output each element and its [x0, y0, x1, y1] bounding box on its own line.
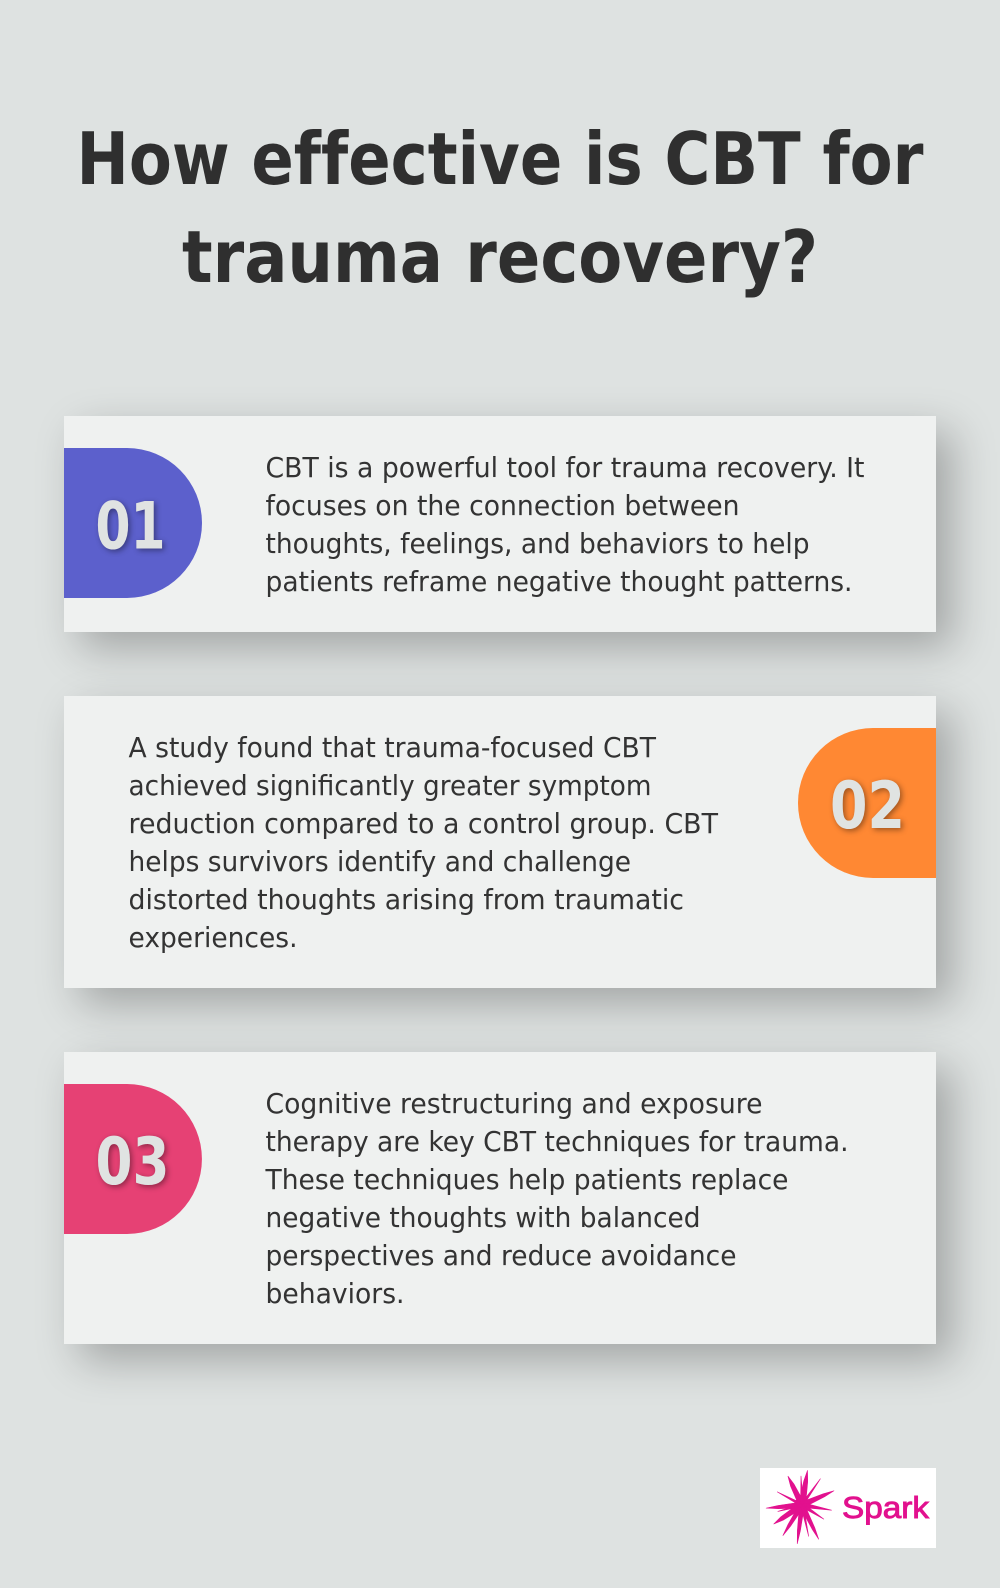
text block 02: achieved significantly greater symptom: [128, 769, 652, 802]
text block 02: [128, 731, 719, 954]
text block 03: therapy are key CBT techniques for trauma.: [266, 1125, 848, 1158]
text block 03: negative thoughts with balanced: [266, 1201, 700, 1234]
text block 02: reduction compared to a control group. CBT: [128, 807, 719, 840]
logo: Spark: [760, 1468, 936, 1548]
text block 03: [265, 1087, 848, 1310]
badge 02: 02: [830, 769, 905, 844]
text block 03: behaviors.: [266, 1277, 404, 1310]
icon: spark star: [766, 1470, 835, 1544]
badge 01: 01: [96, 489, 166, 564]
text block 03: perspectives and reduce avoidance: [266, 1239, 736, 1272]
panel: card 03: [64, 1052, 936, 1344]
badge 02: [798, 728, 936, 878]
text block 01: CBT is a powerful tool for trauma recovery. It: [266, 451, 865, 484]
text block 01: [266, 451, 865, 598]
text block 02: experiences.: [128, 921, 298, 954]
logo wordmark: Spark: [842, 1490, 930, 1525]
panel: card 02: [64, 696, 936, 988]
text block 02: helps survivors identify and challenge: [128, 845, 631, 878]
text block 03: These techniques help patients replace: [265, 1163, 788, 1196]
badge 03: [64, 1084, 202, 1234]
text block 01: thoughts, feelings, and behaviors to help: [266, 527, 810, 560]
text block 01: focuses on the connection between: [266, 489, 740, 522]
title: [76, 117, 924, 299]
text block 01: patients reframe negative thought patterns.: [266, 565, 852, 598]
title line 2: trauma recovery?: [182, 215, 818, 299]
text block 02: A study found that trauma-focused CBT: [128, 731, 657, 764]
badge 01: [64, 448, 202, 598]
text block 02: distorted thoughts arising from traumatic: [128, 883, 684, 916]
badge 03: 03: [96, 1125, 170, 1200]
panel: card 01: [64, 416, 936, 632]
text block 03: Cognitive restructuring and exposure: [266, 1087, 762, 1120]
